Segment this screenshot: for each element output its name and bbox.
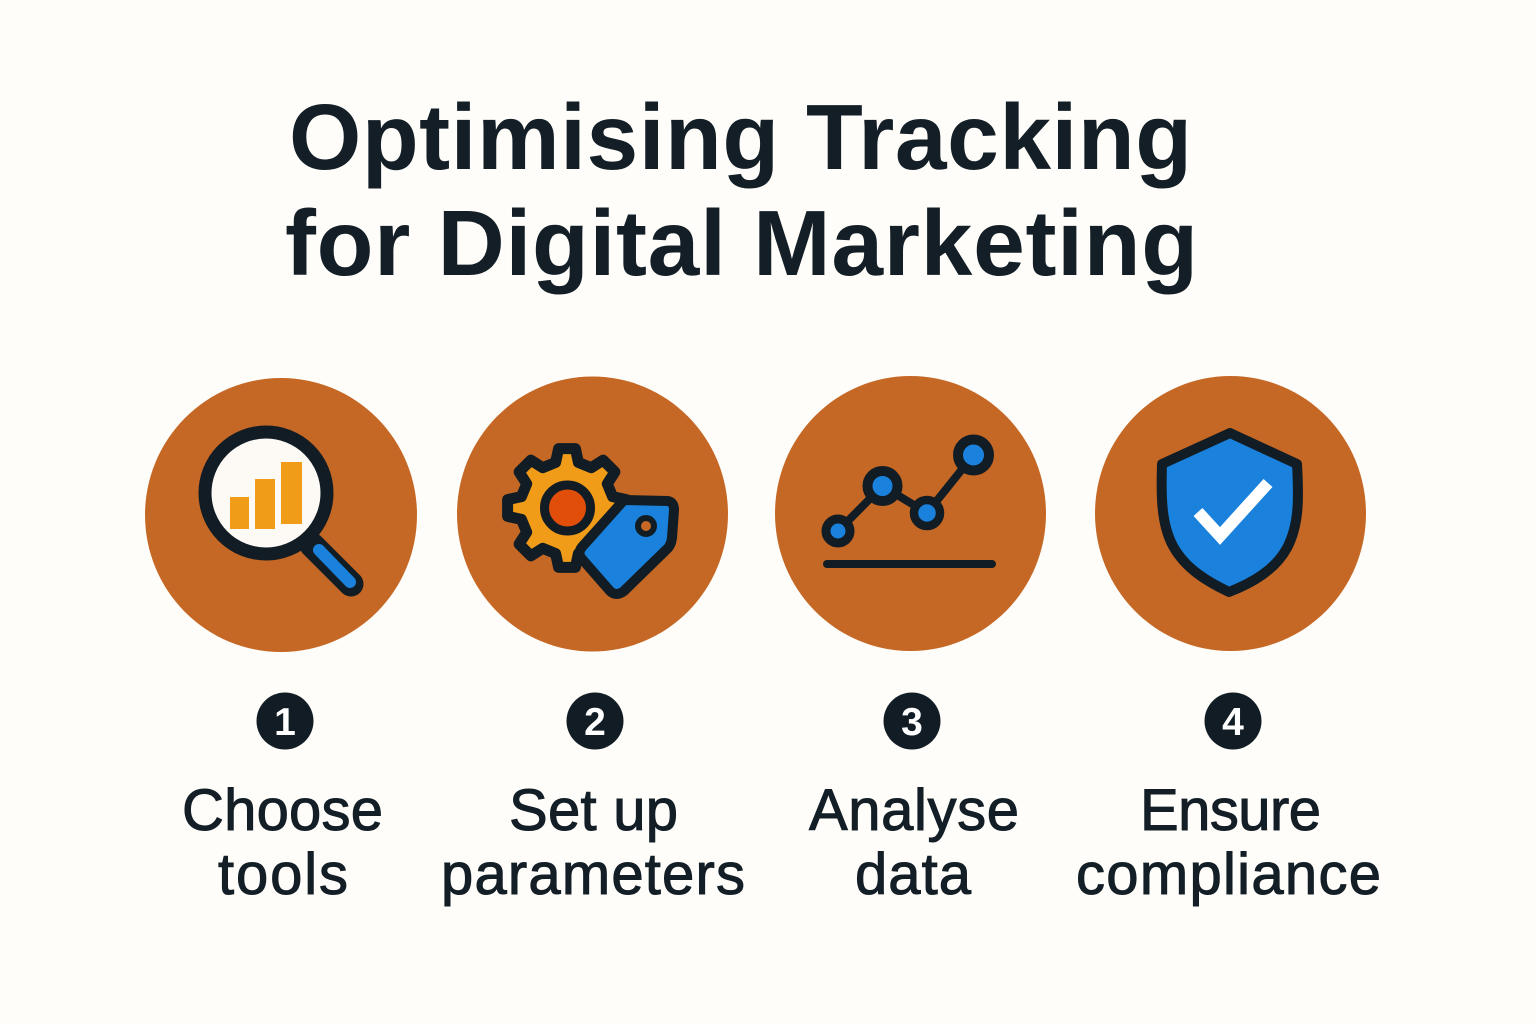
tag xyxy=(580,500,674,594)
gear xyxy=(508,449,626,567)
title xyxy=(285,85,1198,295)
icon circle 1 xyxy=(145,378,417,652)
number badge 3: 3 xyxy=(901,701,923,744)
label: choose tools: Choose xyxy=(182,778,383,843)
icon circle 3 xyxy=(775,376,1046,651)
label: analyse data xyxy=(809,778,1019,907)
icon circle 2 xyxy=(457,376,728,652)
number badge 1 xyxy=(256,692,314,750)
label: ensure compliance: compliance xyxy=(1076,842,1381,907)
number badge 4 xyxy=(1204,692,1262,750)
step 4: ensure compliance xyxy=(1076,376,1381,907)
title: Optimising Tracking xyxy=(289,85,1192,189)
step 2: set up parameters xyxy=(441,376,745,907)
label: analyse data: data xyxy=(855,842,972,907)
label: analyse data: Analyse xyxy=(809,778,1019,843)
label: set up parameters: parameters xyxy=(441,842,745,907)
icon: shield with check xyxy=(1162,433,1298,592)
label: ensure compliance xyxy=(1076,778,1381,907)
label: ensure compliance: Ensure xyxy=(1140,778,1321,843)
number badge 1: 1 xyxy=(274,701,296,744)
step 1: choose tools xyxy=(145,378,417,907)
icon: line chart xyxy=(826,440,992,564)
label: set up parameters xyxy=(441,778,745,907)
number badge 3 xyxy=(884,692,940,750)
number badge 2 xyxy=(566,692,624,750)
step 3: analyse data xyxy=(775,376,1046,907)
label: choose tools: tools xyxy=(218,842,348,907)
icon: magnifying glass with bars xyxy=(205,432,351,584)
number badge 2: 2 xyxy=(584,701,606,744)
icon: gear with tag xyxy=(508,449,674,594)
icon circle 4 xyxy=(1095,376,1366,651)
title: for Digital Marketing xyxy=(285,191,1198,295)
label: choose tools xyxy=(182,778,383,907)
label: set up parameters: Set up xyxy=(509,778,678,843)
number badge 4: 4 xyxy=(1222,701,1244,744)
